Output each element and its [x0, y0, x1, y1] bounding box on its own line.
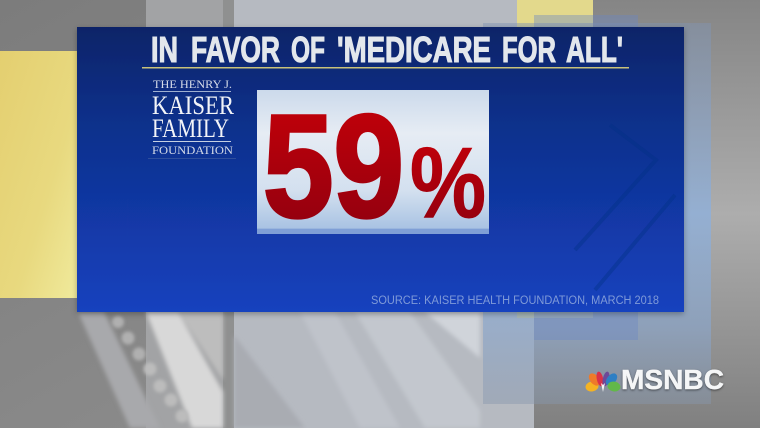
- yellow block top: [517, 0, 593, 27]
- stat number: 59: [263, 84, 404, 248]
- title: OF: [291, 29, 325, 70]
- title: 'MEDICARE: [337, 29, 491, 70]
- blue translucent backing rectangles: [483, 15, 711, 404]
- MSNBC logo: [585, 364, 724, 395]
- title: FOR: [502, 29, 556, 70]
- title: ALL': [566, 29, 623, 70]
- icon: NBC peacock: [585, 371, 621, 393]
- logo: Kaiser Family Foundation: FAMILY: [152, 114, 229, 143]
- title rule: [142, 67, 629, 68]
- logo: Kaiser Family Foundation: FOUNDATION: [152, 143, 233, 157]
- wordmark: MSNBC: [621, 364, 724, 395]
- logo: Kaiser Family Foundation: THE HENRY J.: [153, 79, 232, 91]
- title: IN: [151, 29, 178, 70]
- title: FAVOR: [191, 29, 280, 70]
- yellow strip under panel: [517, 312, 593, 318]
- logo: Kaiser Family Foundation: KAISER: [152, 91, 235, 120]
- yellow block left: [0, 51, 77, 298]
- stat percent sign: %: [410, 127, 486, 239]
- panel: blue background: [77, 27, 684, 312]
- source line: SOURCE: KAISER HEALTH FOUNDATION, MARCH 2018: [371, 295, 659, 307]
- stat box: 59%: [257, 84, 489, 248]
- title: [151, 29, 623, 70]
- logo: Kaiser Family Foundation: [148, 79, 236, 159]
- panel chevron decoration: [575, 125, 675, 290]
